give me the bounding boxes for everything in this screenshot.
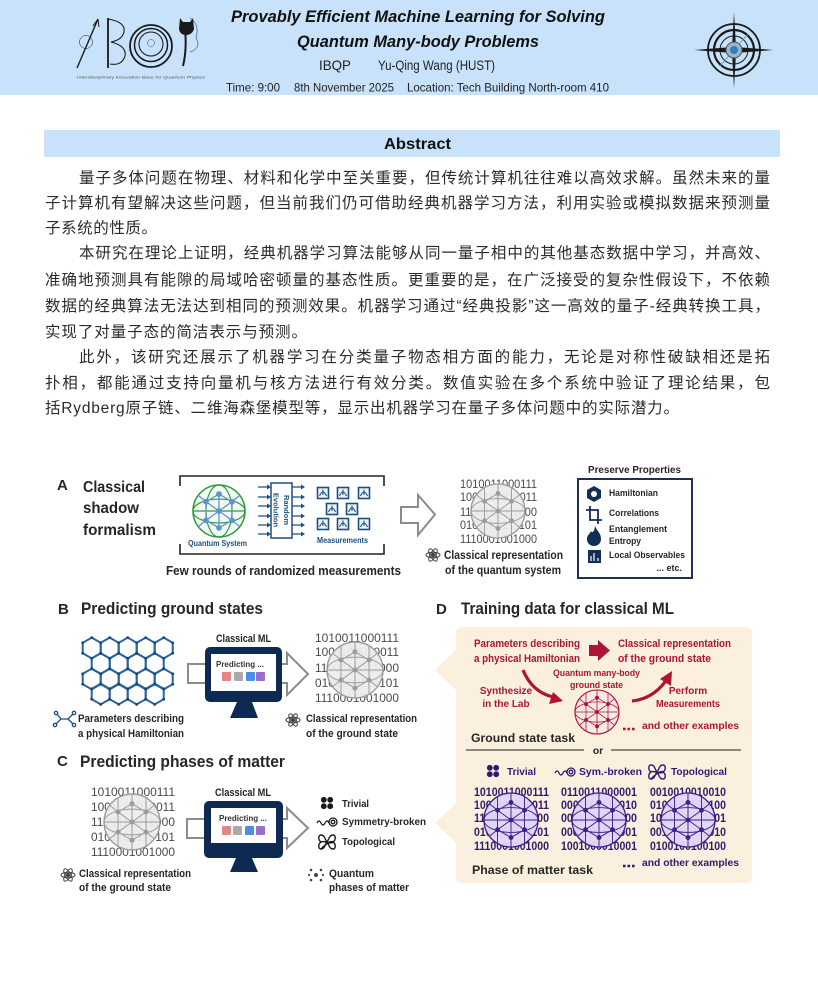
caption: classical representation xyxy=(426,548,563,577)
panel B: predicting ground states xyxy=(53,600,417,740)
ground state flow: ground state xyxy=(570,680,623,691)
caption: parameters: a physical Hamiltonian xyxy=(78,728,184,740)
ground state flow xyxy=(474,638,739,734)
abstract body text: 此外，该研究还展示了机器学习在分类量子物态相方面的能力，无论是对称性破缺相还是拓 xyxy=(79,348,770,366)
ground state flow: Measurements xyxy=(656,699,720,710)
caption: classical representation: Classical representation xyxy=(306,713,417,725)
topological column: 0010010010010 xyxy=(650,827,726,839)
ground state flow: of the ground state xyxy=(618,653,711,665)
ground state flow: Classical representation xyxy=(618,638,731,650)
panel C heading: C xyxy=(57,753,68,770)
symmetry-broken column: 0011001100100 xyxy=(561,813,637,825)
binary string with sphere: 1110001001000 xyxy=(91,845,175,859)
binary string with sphere: 1100110011000 xyxy=(460,505,537,519)
other examples: and other examples xyxy=(642,720,739,732)
arrow: block red xyxy=(589,640,610,661)
topological column: 0100100100100 xyxy=(650,841,726,853)
trivial column: 0101100110101 xyxy=(474,827,550,839)
icon: hamiltonian xyxy=(587,486,601,502)
arrow to classical representation xyxy=(401,495,435,535)
symmetry-broken column: 1001000010001 xyxy=(561,841,638,853)
ground state flow: Perform xyxy=(669,686,707,697)
abstract body text: 扑相，都能通过支持向量机与核方法进行有效分类。数值实验在多个系统中验证了理论结果，包 xyxy=(45,374,770,392)
caption: classical representation xyxy=(61,868,191,894)
panel C heading: Predicting phases of matter xyxy=(80,753,286,771)
abstract body text: 数据的经典算法无法达到相同的预测效果。机器学习通过“经典投影”这一高效的量子-经典转换工具， xyxy=(45,296,770,315)
measurement tiles xyxy=(318,488,370,530)
icon: bar chart xyxy=(588,550,601,563)
property labels: Entropy xyxy=(609,536,642,546)
trivial column xyxy=(474,787,550,853)
box captions xyxy=(188,536,368,548)
time and location: Location: Tech Building North-room 410 xyxy=(407,80,609,94)
phase legend row: Topological xyxy=(671,766,727,778)
topological column: 0100100100100 xyxy=(650,800,726,812)
caption: classical representation: of the ground state xyxy=(79,882,171,894)
symmetry-broken column: 0001100100001 xyxy=(561,827,638,839)
binary string with sphere: 0101100110101 xyxy=(315,676,399,690)
binary string with sphere: 1001100010011 xyxy=(460,490,537,504)
caption: classical representation xyxy=(286,713,417,740)
monitor: classical ML: Classical ML xyxy=(215,787,271,799)
binary string with sphere: 1100110011000 xyxy=(315,661,399,675)
other examples: and other examples xyxy=(642,857,739,869)
panel D: training data for classical ML xyxy=(435,600,752,883)
binary string with sphere xyxy=(91,785,175,859)
property labels: Local Observables xyxy=(609,550,685,560)
property labels xyxy=(609,488,685,573)
topological column: 1001001001001 xyxy=(650,813,727,825)
panel A heading: formalism xyxy=(83,522,156,539)
binary string with sphere: 1110001001000 xyxy=(460,532,537,546)
property labels: ... etc. xyxy=(656,563,682,573)
logo: IBQP xyxy=(77,18,205,80)
monitor: classical ML xyxy=(205,633,282,718)
panel A heading xyxy=(57,477,156,539)
trivial column: 1001100010011 xyxy=(474,800,550,812)
panel A: classical shadow formalism xyxy=(57,465,692,578)
trivial column: 1110001001000 xyxy=(474,841,549,853)
phase legend xyxy=(317,797,426,849)
binary string with sphere xyxy=(315,631,399,705)
measurement bracket box xyxy=(180,476,384,554)
panel A heading: Classical xyxy=(83,479,145,496)
trivial column: 1100110011000 xyxy=(474,813,549,825)
caption: classical representation: Classical representation xyxy=(79,868,191,880)
box captions: Quantum System xyxy=(188,539,247,548)
sphere: many-body ground state xyxy=(575,690,619,734)
random evolution block: Evolution xyxy=(272,493,280,527)
abstract heading xyxy=(44,130,780,157)
caption: parameters: Parameters describing xyxy=(78,713,184,725)
ground state task label: Ground state task xyxy=(471,733,576,745)
property labels: Entanglement xyxy=(609,524,667,534)
abstract body text: 本研究在理论上证明，经典机器学习算法能够从同一量子相中的其他基态数据中学习，并高效、 xyxy=(79,243,770,262)
caption: classical representation: of the quantum system xyxy=(445,565,561,577)
abstract body text: 子系统的性质。 xyxy=(45,219,157,237)
panel B heading: Predicting ground states xyxy=(81,600,263,618)
panel C: predicting phases of matter xyxy=(57,753,426,894)
ground state flow: Parameters describing xyxy=(474,638,580,650)
trivial column: 1010011000111 xyxy=(474,787,550,799)
symmetry-broken column: 0110011000001 xyxy=(561,787,638,799)
arrow through monitor xyxy=(188,653,308,695)
speaker line xyxy=(319,57,495,73)
binary string with sphere: 1001100010011 xyxy=(91,800,175,814)
phase legend: Topological xyxy=(342,836,395,848)
binary string with sphere: 1010011000111 xyxy=(91,785,175,799)
monitor: classical ML xyxy=(204,787,283,872)
abstract body text: 实现了对量子态的简洁表示与预测。 xyxy=(45,323,307,341)
binary string with sphere: 1010011000111 xyxy=(460,477,537,491)
caption: classical representation: of the ground state xyxy=(306,728,398,740)
speaker line: Yu-Qing Wang (HUST) xyxy=(378,57,495,73)
caption: parameters xyxy=(53,711,184,740)
panel B heading: B xyxy=(58,601,69,618)
time and location: Time: 9:00 xyxy=(226,80,280,94)
abstract body text xyxy=(45,168,770,417)
binary string with sphere: 1100110011000 xyxy=(91,815,175,829)
monitor: classical ML: Classical ML xyxy=(216,633,271,645)
monitor: classical ML: Predicting ... xyxy=(219,814,267,823)
time and location: 8th November 2025 xyxy=(294,80,394,94)
time and location xyxy=(226,80,609,94)
arrow: measure xyxy=(632,671,672,701)
binary string with sphere: 1010011000111 xyxy=(315,631,399,645)
random evolution block xyxy=(258,483,305,538)
binary string with sphere: 1001100010011 xyxy=(315,645,399,659)
binary string with sphere xyxy=(460,477,537,546)
phase legend: Trivial xyxy=(342,798,369,810)
speaker line: IBQP xyxy=(319,57,351,73)
ground state flow: a physical Hamiltonian xyxy=(474,653,580,665)
binary string with sphere: 0101100110101 xyxy=(91,830,175,844)
topological column xyxy=(650,787,727,853)
binary string with sphere: 0101100110101 xyxy=(460,518,537,532)
abstract body text: 准确地预测具有能隙的局域哈密顿量的基态性质。更重要的是，在广泛接受的复杂性假设下，不依赖 xyxy=(45,271,770,289)
box captions: Measurements xyxy=(317,536,368,545)
phase of matter task label: Phase of matter task xyxy=(472,865,594,877)
symmetry-broken column xyxy=(561,787,638,853)
icon: flame xyxy=(587,525,601,546)
panel D heading: D xyxy=(436,601,447,618)
monitor: classical ML: Predicting ... xyxy=(216,660,264,669)
property labels: Correlations xyxy=(609,508,659,518)
phase legend row: Trivial xyxy=(507,766,536,778)
panel D heading: Training data for classical ML xyxy=(461,600,674,618)
caption: classical representation: Classical representation xyxy=(444,550,563,562)
caption: quantum phases: Quantum xyxy=(329,868,374,880)
title: Provably Efficient Machine Learning for Solving xyxy=(231,7,606,26)
caption: few rounds: Few rounds of randomized measurements xyxy=(166,564,401,578)
topological column: 0010010010010 xyxy=(650,787,726,799)
arrow through monitor xyxy=(187,808,308,848)
ground state flow: in the Lab xyxy=(482,699,530,710)
ground state flow: Quantum many-body xyxy=(553,668,641,679)
panel A heading: A xyxy=(57,477,68,494)
preserve properties panel xyxy=(578,465,692,578)
or divider: or xyxy=(593,745,603,757)
property labels: Hamiltonian xyxy=(609,488,658,498)
phase legend row: Sym.-broken xyxy=(579,766,642,778)
icon: correlations xyxy=(586,506,602,524)
caption: quantum phases: phases of matter xyxy=(329,882,410,894)
caption: quantum phases xyxy=(308,868,410,894)
symmetry-broken column: 0001100110010 xyxy=(561,800,637,812)
honeycomb lattice xyxy=(81,636,174,706)
ground state flow: Synthesize xyxy=(480,686,533,697)
quantum system sphere xyxy=(193,485,245,537)
abstract heading: Abstract xyxy=(384,136,452,153)
preserve properties panel: Preserve Properties xyxy=(588,465,681,476)
logo: compass xyxy=(694,12,773,88)
header band: Quantum Many-body Problems xyxy=(297,32,539,51)
panel A heading: shadow xyxy=(83,500,140,517)
abstract body text: 子计算机有望解决这些问题，但当前我们仍可借助经典机器学习方法，利用实验或模拟数据来预测量 xyxy=(45,193,770,212)
abstract body text: 量子多体问题在物理、材料和化学中至关重要，但传统计算机往往难以高效求解。虽然未来的量 xyxy=(79,168,770,187)
cream card with notches xyxy=(435,627,752,883)
arrow: synthesize xyxy=(523,670,563,704)
logo: IBQP: Interdisciplinary Innovation Base for Quantum Physics xyxy=(77,74,205,80)
phase legend: Symmetry-broken xyxy=(342,816,426,828)
abstract body text: 括Rydberg原子链、二维海森堡模型等，显示出机器学习在量子多体问题中的实际潜力。 xyxy=(45,399,679,417)
header band xyxy=(0,0,818,95)
phase legend row xyxy=(487,765,727,779)
binary string with sphere: 1110001001000 xyxy=(315,691,399,705)
random evolution block: Random xyxy=(282,495,291,525)
